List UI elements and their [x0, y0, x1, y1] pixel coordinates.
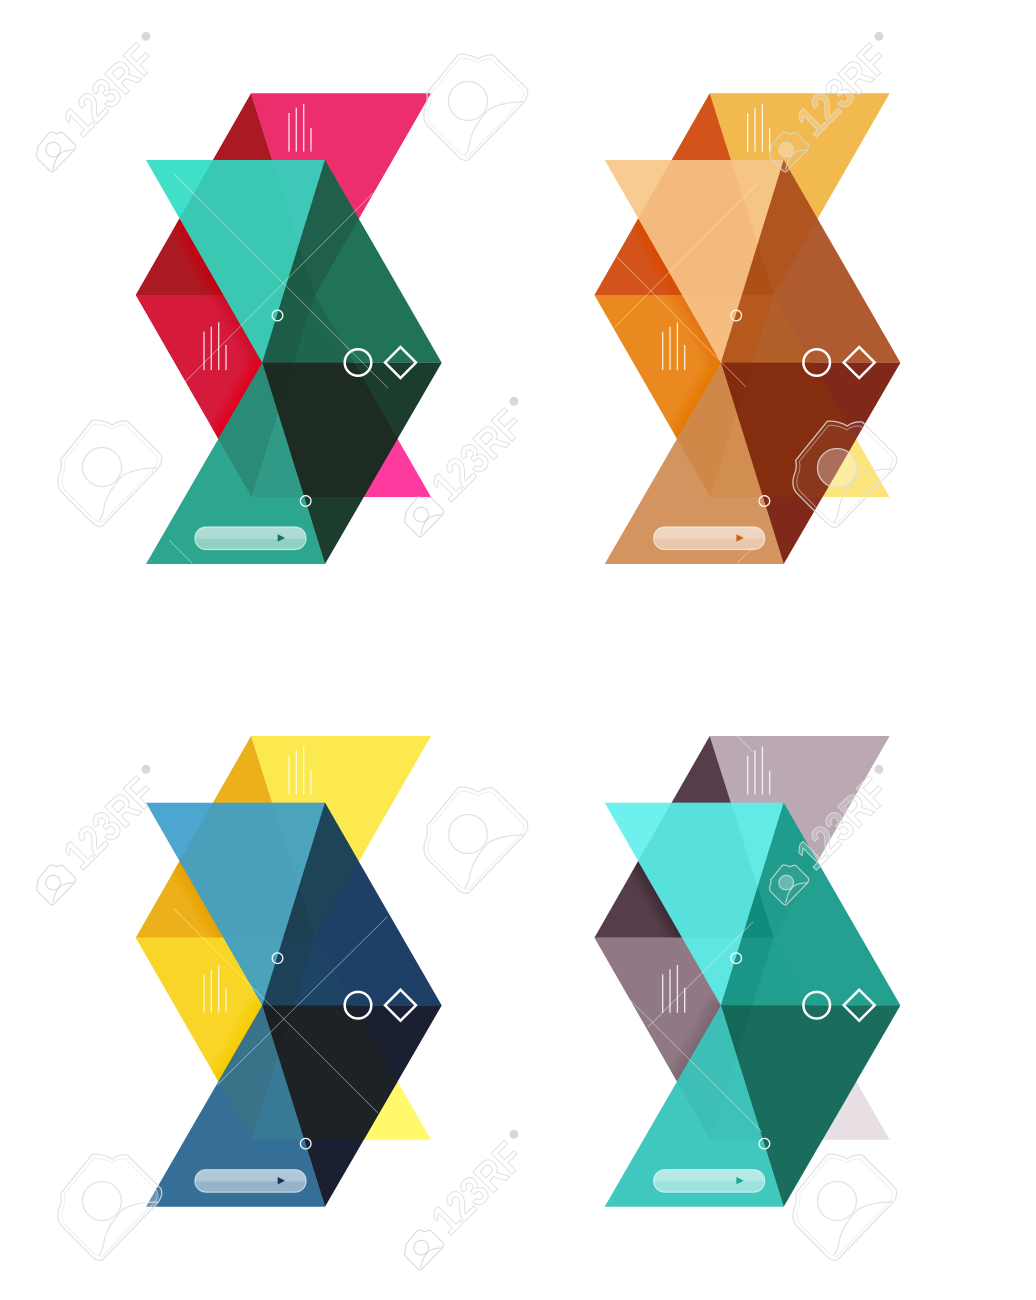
watermark text: top right: 123RF [788, 36, 898, 146]
thin diagonal lines [173, 908, 387, 1113]
front arrow shape: blue and navy [146, 802, 442, 1207]
icon: lower bar chart [663, 322, 685, 370]
icon: small lower ring [300, 496, 311, 506]
icon: upper bar chart [289, 104, 311, 152]
thin diagonal lines [630, 736, 762, 1132]
icon: lower bar chart [663, 965, 685, 1013]
icon: large circle [345, 349, 371, 376]
rear folded shape: amber and orange [594, 93, 890, 497]
panel: yellow and blue arrow infographic [124, 736, 442, 1207]
watermark text: lower left [16, 758, 182, 924]
watermark text: top left: 123RF [55, 36, 165, 146]
icon: large circle [803, 992, 830, 1018]
panel: crimson and teal arrow infographic [124, 93, 442, 564]
icon: upper bar chart [289, 747, 311, 794]
icon: small lower ring [300, 1138, 311, 1149]
watermark camera outlines [58, 54, 897, 1260]
icon: diamond [844, 347, 875, 378]
watermark text: lower left: 123RF [55, 769, 165, 879]
rear folded shape: pink and red [136, 93, 431, 497]
watermark: translucent dot on blue corner [137, 1186, 159, 1208]
watermark text: bottom: 123RF [423, 1134, 533, 1244]
front arrow shape: peach and brown [604, 160, 900, 564]
front arrow shape: aqua and green [604, 802, 900, 1207]
thin diagonal lines [169, 173, 388, 563]
watermark text: middle [384, 390, 550, 556]
icon: lower bar chart [204, 322, 226, 370]
icon: small upper ring [731, 953, 742, 964]
thin diagonal lines [615, 183, 758, 563]
button: pill with play arrow [195, 1170, 306, 1192]
rear folded shape: yellow and amber [136, 736, 431, 1140]
icon: upper bar chart [748, 747, 770, 794]
watermark text: top left [16, 25, 182, 191]
icon: upper bar chart [748, 104, 770, 152]
icon: large circle [345, 992, 371, 1018]
icon: small upper ring [731, 310, 742, 321]
rear folded shape: mauve and plum [594, 736, 890, 1140]
icon: large circle [803, 349, 830, 376]
icon: small lower ring [759, 496, 770, 506]
button: pill with play arrow [654, 1170, 765, 1192]
button: pill with play arrow [654, 527, 765, 550]
icon: lower bar chart [204, 965, 226, 1013]
icon: small upper ring [272, 953, 283, 964]
panel: orange and brown arrow infographic [583, 93, 900, 564]
watermark text: top right [749, 25, 915, 191]
button: pill with play arrow [195, 527, 306, 550]
front arrow shape: teal and dark green [146, 160, 442, 564]
panel: mauve and aqua arrow infographic [583, 736, 900, 1207]
watermark text: lower right: 123RF [788, 769, 898, 879]
watermark text: lower right [749, 758, 915, 924]
icon: diamond [844, 990, 875, 1021]
icon: diamond [385, 347, 416, 378]
icon: small lower ring [759, 1138, 770, 1149]
watermark text: bottom [384, 1123, 550, 1289]
watermark text: middle: 123RF [423, 401, 533, 511]
icon: small upper ring [272, 310, 283, 321]
icon: diamond [385, 990, 416, 1021]
